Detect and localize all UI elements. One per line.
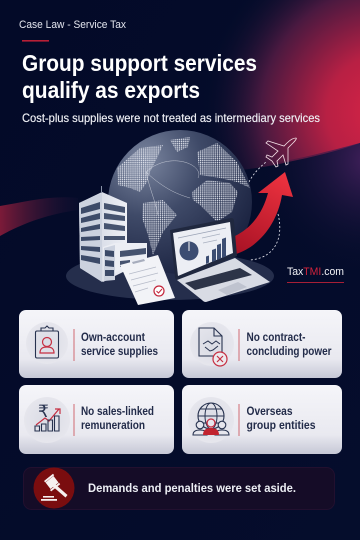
icon: rupee with rising bars	[24, 397, 70, 443]
eyebrow: case law label: Case Law - Service Tax	[19, 19, 127, 31]
icon: gavel	[34, 468, 74, 508]
panel: own-account service supplies: service supplies	[81, 346, 158, 358]
panel: own-account service supplies	[19, 310, 174, 378]
panel: no sales-linked remuneration: remuneration	[81, 420, 145, 432]
panel: overseas group entities: Overseas	[246, 406, 292, 418]
brand: TaxTMI.com	[287, 266, 344, 283]
illustration: platform	[66, 252, 274, 300]
subtitle: Cost-plus supplies were not treated as intermediary services	[22, 111, 320, 125]
icon: globe with group of people	[188, 397, 234, 443]
icon: clipboard with person	[26, 322, 68, 364]
panel: overseas group entities	[182, 385, 342, 454]
illustration: clipboard document	[120, 255, 175, 305]
illustration: red growth arrow	[235, 172, 293, 254]
icon: airplane	[266, 138, 296, 167]
panel: no sales-linked remuneration	[19, 385, 174, 454]
panel: outcome banner	[24, 468, 334, 510]
panel: own-account service supplies: Own-account	[81, 332, 145, 344]
panel: overseas group entities: group entities	[246, 420, 316, 432]
illustration: globe	[108, 130, 252, 274]
title	[22, 50, 257, 103]
icon: contract with handshake and cross	[190, 322, 234, 366]
brand: TaxTMI.com: TaxTMI.com	[287, 266, 344, 278]
title: Group support services	[22, 50, 257, 76]
panel: no contract-concluding power	[182, 310, 342, 378]
panel: no sales-linked remuneration: No sales-linked	[81, 406, 154, 418]
title: qualify as exports	[22, 77, 200, 103]
icon: rupee with rising bars: ₹	[38, 402, 49, 421]
illustration: dashed flight path	[249, 162, 280, 260]
accent rule	[22, 40, 49, 42]
outcome text: Demands and penalties were set aside.	[88, 481, 296, 495]
panel: no contract-concluding power: No contract-	[246, 332, 306, 344]
illustration: laptop	[170, 218, 270, 302]
illustration: office building	[79, 186, 147, 282]
panel: no contract-concluding power: concluding power	[246, 346, 332, 358]
